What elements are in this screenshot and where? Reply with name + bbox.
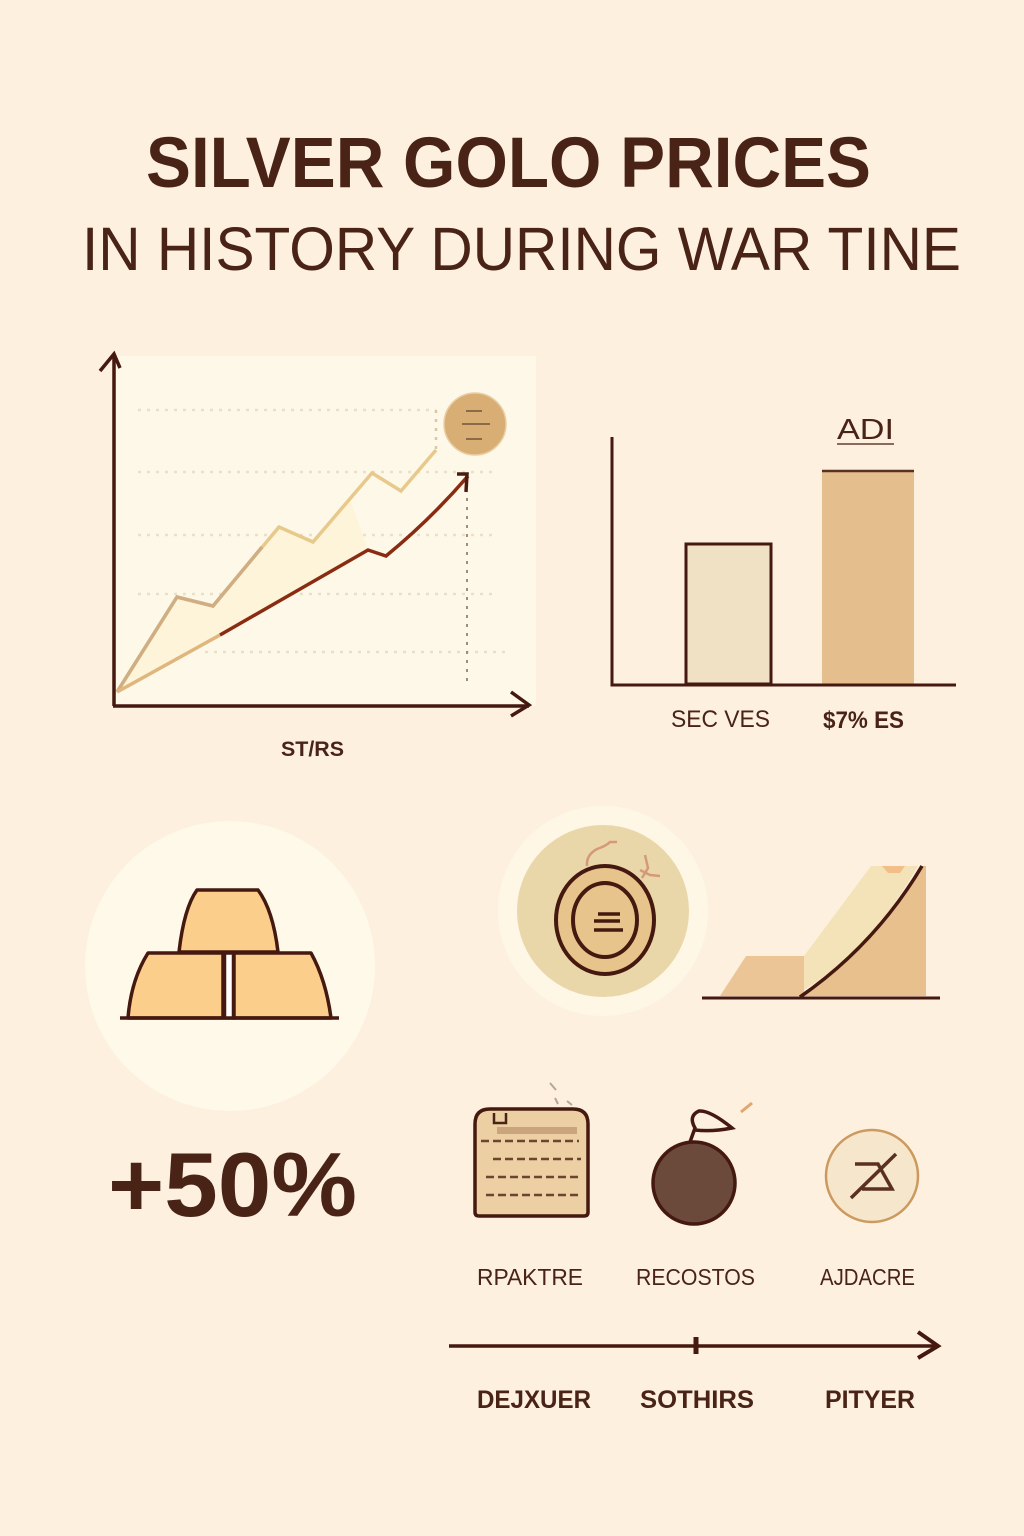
big stat: +50% — [108, 1135, 357, 1236]
area between lines — [117, 499, 368, 692]
timeline arrow — [449, 1332, 938, 1358]
x axis label: ST/RS — [281, 738, 344, 761]
axes — [100, 354, 529, 716]
panel: line chart — [100, 354, 536, 761]
chart background — [116, 356, 536, 706]
bar captions: SEC VES — [671, 706, 770, 733]
silver price line — [117, 474, 468, 692]
timeline labels — [477, 1386, 915, 1414]
icon labels: RECOSTOS — [636, 1264, 755, 1290]
bar captions — [671, 706, 904, 734]
panel: coin emblem — [498, 806, 708, 1016]
emblem rings — [556, 866, 654, 974]
dotted marker line — [466, 498, 468, 684]
icon: gold bars — [120, 890, 339, 1018]
panel: bar chart — [612, 414, 956, 734]
title — [82, 124, 961, 283]
icon: coin — [444, 393, 506, 455]
bar: left — [686, 544, 771, 684]
panel: ramp chart — [702, 866, 940, 998]
icon labels: AJDACRE — [820, 1264, 915, 1290]
bar captions: $7% ES — [823, 707, 904, 734]
circle background — [85, 821, 375, 1111]
icon labels: RPAKTRE — [477, 1264, 583, 1290]
axes — [612, 437, 956, 685]
gold price line — [117, 450, 436, 692]
icon: no symbol badge — [826, 1130, 918, 1222]
cracks — [587, 842, 660, 878]
timeline labels: PITYER — [825, 1386, 915, 1414]
bar: right — [822, 471, 914, 684]
icon: document — [475, 1083, 588, 1216]
title: IN HISTORY DURING WAR TINE — [82, 215, 961, 283]
timeline labels: DEJXUER — [477, 1386, 591, 1414]
panel: gold bars — [85, 821, 375, 1111]
icon: bomb — [653, 1103, 752, 1224]
bar label: ADI — [837, 414, 894, 446]
title: SILVER GOLO PRICES — [146, 124, 871, 203]
timeline labels: SOTHIRS — [640, 1386, 754, 1414]
icon labels — [477, 1264, 915, 1290]
